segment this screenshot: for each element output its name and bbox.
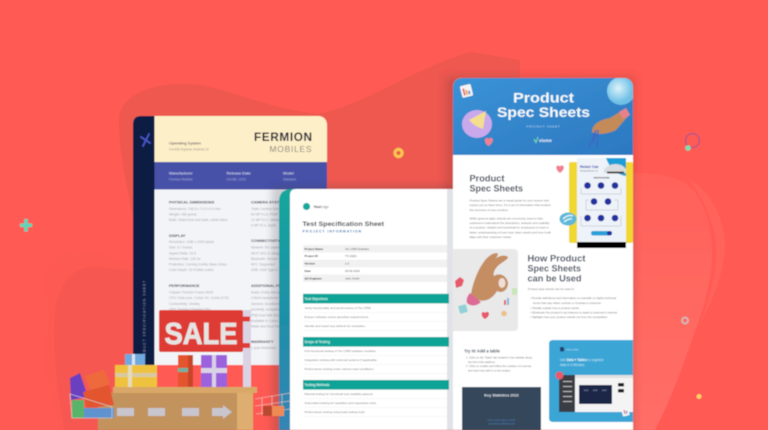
header title: [497, 90, 590, 120]
spec column two: [251, 200, 297, 350]
heading: Product Spec Sheets: Product: [470, 174, 504, 184]
dark statistics box: consectetur adipiscing elit: [488, 422, 515, 426]
spine and page: [279, 189, 456, 430]
heading: Fermion: FERMION: [254, 130, 312, 144]
project table: 1.0: [345, 262, 349, 266]
decoration: purple ring with green dot: [685, 134, 700, 151]
band details: Manufacturer: [169, 170, 193, 176]
heading: Try It: Try It! Add a table: [464, 348, 501, 354]
background blob: upper dark: [119, 52, 520, 260]
spec column one: Refresh Rate: 120 Hz: [169, 257, 201, 261]
usage list: • Highlight how your product stands out from the competition.: [530, 315, 608, 319]
decoration: yellow ring: [393, 148, 404, 158]
spec column two: 64 MP f/1.8, PDAF: [251, 212, 278, 216]
icon: pink badge: [556, 372, 564, 380]
panel: hand photo: [453, 249, 518, 331]
card shadow: [272, 186, 462, 430]
section: test objectives: Identify and report any defects for resolution.: [304, 324, 366, 328]
pole: [243, 310, 251, 388]
black bar: [577, 242, 626, 248]
usage list: Product spec sheets can be used to:: [528, 287, 575, 291]
mini brochure: Rebel Car: [577, 158, 626, 248]
spec column one: Build: Glass front and back, metal frame: [169, 218, 228, 222]
section: scope of testing: Performance testing under various load conditions.: [304, 367, 374, 371]
icon: hand with clip: [589, 108, 630, 147]
blue tutorial panel: [549, 340, 633, 422]
screenshot: 2021: [584, 390, 589, 392]
band details: Fermion Mobiles: [169, 178, 193, 182]
usage list: [528, 287, 618, 319]
band details: [169, 170, 296, 182]
heading: How Product Spec Sheets can be Used: Spec Sheets: [528, 264, 581, 274]
spec column two: IP68 Dual SIM Slot: [251, 314, 279, 318]
gift: orange: [178, 355, 193, 387]
spec circles: [584, 182, 618, 221]
cart right: [255, 393, 290, 416]
card body: [133, 116, 327, 365]
spec column one: Chipset: Fermion Fusion 9000: [169, 290, 213, 294]
spec column one: PERFORMANCE: [169, 283, 200, 288]
wooden box: [98, 387, 257, 430]
section: scope of testing: [303, 337, 449, 374]
page body: [290, 189, 448, 430]
project table: QA Engineer: [304, 276, 323, 280]
tutorial text: Use Data + Tables to organize: [560, 358, 604, 362]
section: testing methods: Automated testing for repetitive and regression tests.: [304, 401, 377, 405]
right edge: [447, 189, 454, 430]
project table: Tex CRM Software: [345, 247, 369, 251]
spec column two: Wi-Fi: 802.11 a/b/g/n/ac: [251, 252, 286, 256]
header title: Product: [513, 90, 574, 106]
spec column two: Network: 5G capable: [251, 246, 282, 250]
tutorial text: [560, 358, 604, 367]
try it steps: and input any add in to the project.: [468, 368, 511, 372]
spec column two: Available in Colors: [251, 319, 279, 323]
icon: document: [621, 406, 630, 417]
heading: How Product Spec Sheets can be Used: can be Used: [528, 274, 582, 284]
spec column two: USB: USB Type-C 3.2: [251, 268, 284, 272]
section: testing methods: [303, 380, 449, 416]
dark statistics box: Key Statistics 2022: [484, 394, 519, 398]
background blob: right light: [620, 173, 712, 430]
project table: [303, 245, 447, 282]
try it steps: [466, 356, 532, 372]
intro paragraphs: Product Spec Sheets are a visual guide for your buyers who: [470, 198, 550, 202]
spec column one: Resolution: 1080 x 2400 pixels: [169, 240, 214, 244]
band details: Model: [283, 170, 294, 176]
spec column two: NFC: Supported: [251, 262, 275, 266]
project table: 05-06-2024: [345, 269, 360, 273]
spec column two: CONNECTIVITY: [251, 238, 280, 243]
header subtitle: PROJECT SHEET: [527, 124, 560, 128]
spec column one: DISPLAY: [169, 233, 186, 238]
spec column two: ADDITIONAL FEATURES: [251, 283, 297, 288]
section: testing methods: Manual testing for functional and usability aspects.: [304, 392, 374, 396]
spec column one: CPU: Octa-core, Cortex X4, Cortex A720: [169, 296, 229, 300]
sidebar: [133, 116, 154, 365]
heading: How Product Spec Sheets can be Used: [528, 254, 586, 284]
spec column two: WARRANTY: [251, 339, 274, 344]
icon: small heart: [556, 165, 564, 173]
illustration: sale scene: [70, 310, 290, 430]
spec column one: PHYSICAL DIMENSIONS: [169, 200, 215, 204]
decoration: yellow dot: [696, 394, 702, 399]
heading: Mobiles: MOBILES: [270, 144, 312, 154]
spec column two: Water and Dust Res: [251, 324, 281, 328]
icon: bar chart card: [460, 84, 473, 98]
shopping cart with gifts: [70, 370, 114, 418]
visme logo: [534, 137, 552, 143]
section: testing methods: Performance testing using load testing tools.: [304, 410, 366, 414]
gift: blue: [125, 354, 145, 365]
intro paragraphs: align with their customer needs.: [470, 235, 512, 239]
mini brochure: Rebel Car: Standard Electric Car: [580, 170, 598, 172]
gift: purple: [201, 355, 227, 387]
try it steps: 2. Click on a table and follow the creation of a survey: [466, 364, 532, 368]
try it steps: 1. Click on the "Data" tab located in the sidebar along: [466, 356, 532, 360]
visme logo: visme: [539, 138, 552, 143]
logo: [303, 203, 329, 210]
spec column two: Audio: Dolby Atmos: [251, 290, 280, 294]
header band: [453, 78, 633, 155]
intro paragraphs: [470, 198, 551, 239]
sale sign: SALE: [164, 316, 238, 351]
tutorial text: data in 3 Minutes.: [560, 363, 585, 367]
screenshot: 2023: [602, 390, 607, 392]
spec column two: CAMERA SYSTEM: [251, 200, 285, 204]
band details: Standard: [283, 178, 296, 182]
usage list: • Visually explain how a product works.: [530, 306, 580, 310]
icon: blue pillow: [560, 212, 576, 226]
logo: YourLogo: [314, 205, 329, 209]
spec column one: [169, 200, 229, 312]
intro paragraphs: the summary of your product.: [470, 208, 509, 212]
icon: cross logo: [141, 134, 150, 146]
heading: How Product Spec Sheets can be Used: How Product: [528, 254, 586, 264]
page: [453, 78, 633, 430]
arrows on box: [117, 405, 232, 419]
spec column one: Aspect Ratio: 20:9: [169, 252, 196, 256]
spec column one: Color Depth: 16 Profiles colors: [169, 268, 214, 272]
subtitle: PROJECT INFORMATION: [302, 230, 362, 234]
section: test objectives: Ensure software meets specified requirements.: [304, 315, 369, 319]
blue band: [154, 162, 327, 190]
section: test objectives: [303, 294, 449, 330]
usage list: terms that may either confuse or frustrate a customer.: [533, 301, 602, 305]
project table: John Smith: [345, 276, 360, 280]
section: scope of testing: Integration testing with external systems if applicable.: [304, 358, 378, 362]
card three shadow: [445, 76, 635, 430]
panel: Fermion Mobiles spec sheet: [133, 116, 327, 365]
gift: yellow: [115, 365, 157, 387]
project table: Project ID: [304, 254, 318, 258]
panel: Product Spec Sheets document: [453, 77, 635, 430]
intro paragraphs: While great at sight, brands are commonly used to help: [470, 216, 543, 220]
yellow backdrop: [569, 162, 633, 243]
spec column two: Sensors: Accelerometer: [251, 302, 287, 306]
mini brochure: Rebel Car: SPECIFICATIONS: [594, 176, 610, 180]
car: [604, 164, 626, 174]
spec column two: 1 year Restricted: [251, 346, 276, 350]
spec column two: proximity, compass: [251, 308, 279, 312]
usage list: • Provide definitions and information on scientific or highly technical: [530, 296, 616, 300]
intro paragraphs: of a product. Helpful and beneficial for employees to have a: [470, 226, 549, 230]
heading: Product Spec Sheets: Spec Sheets: [470, 184, 523, 194]
project table: Version: [304, 262, 315, 266]
section: test objectives: Verify functionality and performance of Tex CRM.: [304, 306, 372, 310]
spec column one: Size: 6.7 inches: [169, 246, 193, 250]
screenshot: [559, 375, 633, 412]
background blob: right crescent: [688, 179, 725, 325]
sidebar vertical text: PRODUCT SPECIFICATION SHEET: [142, 280, 146, 362]
dark statistics box: Lorem ipsum dolor sit amet: [488, 419, 516, 422]
mini title: Rebel Car: [580, 164, 599, 169]
operating system text: Fun205 Explorer Android 10: [169, 148, 209, 152]
band details: Release Date: [226, 170, 252, 176]
icon: glass sphere: [607, 77, 635, 105]
icon: heart: [485, 138, 493, 146]
intro paragraphs: expect you to have them. It's a set of information that renders: [470, 203, 551, 207]
spec column one: GPU: Fermion Graphics Pro: [169, 308, 210, 312]
screenshot: 2022: [593, 390, 598, 392]
intro paragraphs: faster understanding of how must clean weeks and how it will: [470, 230, 551, 234]
project table: TX-2Q01: [345, 254, 357, 258]
spec column one: Protection: Corning Gorilla Glass Victus: [169, 262, 227, 266]
spec column two: 3.5mm headphone: [251, 296, 279, 300]
icon: pie chart: [462, 110, 492, 138]
cream header: [154, 116, 327, 162]
background blob: lower left: [42, 250, 140, 430]
spec column two: 5 MP f/2.4, depth: [251, 224, 276, 228]
decoration: grey ring: [682, 318, 688, 324]
spec column one: Weight: 188 grams: [169, 212, 197, 216]
spec column two: Triple Camera Setup: [251, 207, 281, 211]
icon: OK hand: [467, 253, 508, 306]
heading: Product Spec Sheets: [470, 174, 523, 194]
operating system text: [169, 140, 209, 152]
section: test objectives: Test Objectives: [304, 297, 328, 301]
header title: Spec Sheets: [497, 104, 590, 120]
tutorial logo: visme video: [566, 348, 579, 352]
project table: Project Name: [304, 247, 323, 251]
mini button: [591, 231, 612, 236]
section: scope of testing: Full functional testing of Tex CRM software modules.: [304, 349, 377, 353]
panel: Test Specification Sheet: [279, 189, 456, 430]
intro paragraphs: customers understand the description, features and usability: [470, 221, 550, 225]
project table: Date: [304, 269, 311, 273]
spec column one: Dimensions: 146.5 x 71.5 x 8.4 mm: [169, 207, 221, 211]
section: testing methods: Testing Methods: [304, 383, 330, 387]
icon: floating chips: [455, 277, 517, 319]
usage list: • Showcase the product's top features to spark a customer's interest.: [530, 310, 618, 314]
background blob: lower left inner: [54, 267, 140, 430]
spec column one: Connectivity: Libraby: [169, 302, 200, 306]
section: scope of testing: Scope of Testing: [304, 340, 330, 344]
decoration: teal plus: [20, 219, 32, 232]
dark statistics box: [462, 387, 541, 430]
try it steps: the left of the platform.: [468, 360, 496, 364]
spec column two: Bluetooth: Version 5.3: [251, 257, 283, 261]
operating system text: Operating System: [169, 140, 202, 146]
title: Test Specification Sheet: [302, 221, 385, 228]
band details: Oct 6th, 2023: [226, 178, 246, 182]
spec column two: 12 MP f/2.2, Ultrawide: [251, 218, 284, 222]
